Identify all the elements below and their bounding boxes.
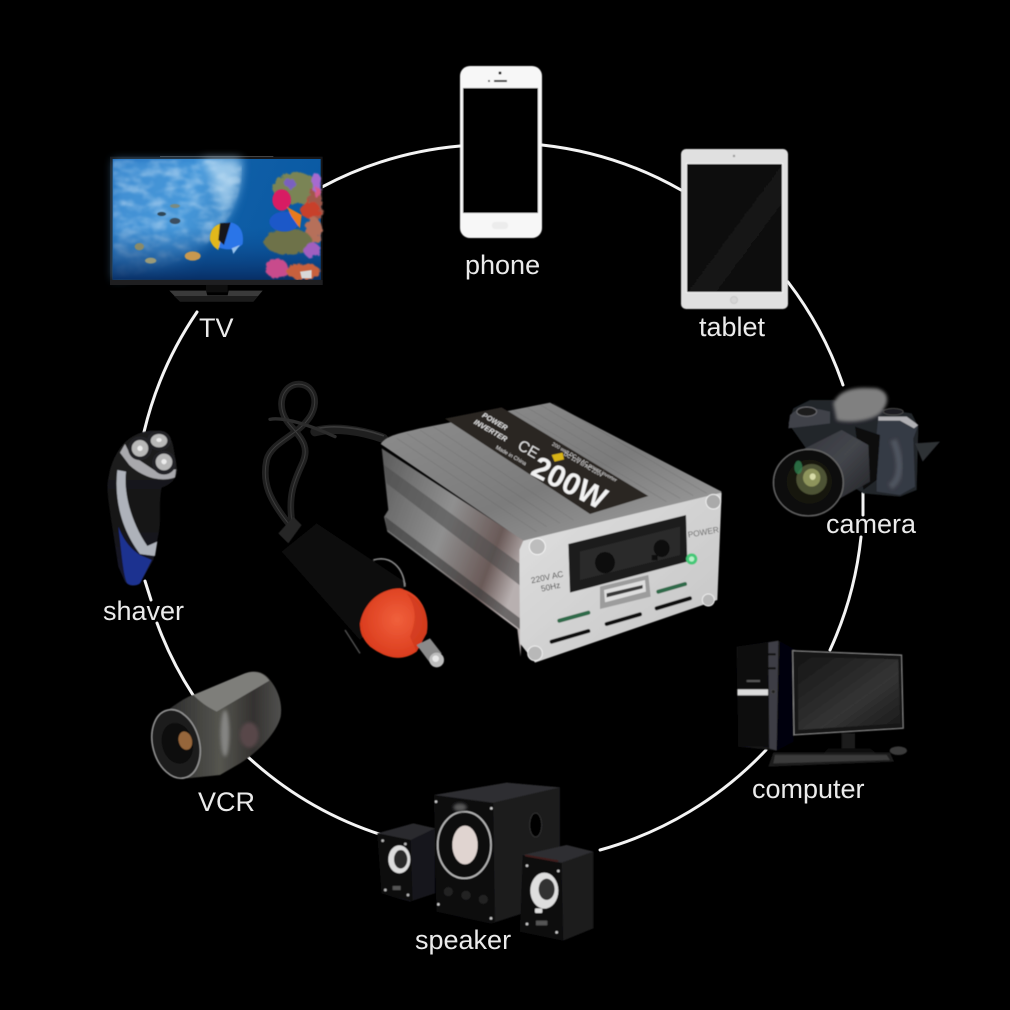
plug metal pin	[417, 638, 442, 665]
left satellite speaker	[377, 823, 435, 902]
phone body	[460, 66, 542, 238]
label text	[472, 411, 618, 516]
device: TV	[110, 156, 323, 343]
device: speaker	[377, 783, 593, 955]
panel markings: POWER	[687, 524, 720, 540]
label text: POWER	[481, 411, 510, 433]
plug red tip	[360, 588, 427, 658]
panel markings: 50Hz	[540, 580, 561, 594]
device: camera	[773, 388, 940, 539]
camera body	[773, 388, 940, 516]
device: phone	[460, 66, 542, 280]
label band	[445, 407, 648, 514]
monitor	[793, 651, 903, 735]
power inverter	[265, 384, 722, 667]
inverter case	[381, 403, 722, 663]
camera lens	[855, 427, 880, 490]
usb port	[600, 575, 651, 609]
tv screen	[113, 159, 321, 280]
panel markings: 220V AC	[530, 569, 564, 585]
power cable	[265, 384, 383, 523]
fish	[135, 189, 312, 278]
phone label: phone	[465, 250, 540, 280]
label text: 200 watt DC to AC power inverter	[551, 442, 618, 484]
tv set	[110, 156, 323, 302]
camcorder body	[144, 671, 281, 784]
shaver body	[107, 431, 177, 586]
tv bezel and stand	[110, 280, 323, 285]
panel markings	[530, 524, 720, 594]
top panel	[381, 403, 722, 541]
speaker set	[377, 783, 593, 941]
device: shaver	[103, 431, 184, 626]
desktop computer	[737, 641, 907, 767]
label text: Made in China	[494, 445, 527, 467]
tablet label: tablet	[699, 312, 766, 342]
power led	[686, 553, 697, 565]
cigarette lighter plug	[278, 517, 444, 667]
device: VCR camcorder	[144, 671, 281, 817]
right satellite speaker	[520, 845, 593, 941]
keyboard and mouse	[768, 753, 894, 767]
connecting circle	[144, 145, 863, 850]
side panel	[382, 448, 523, 657]
label text: 200W	[526, 450, 612, 516]
speaker label: speaker	[415, 925, 511, 955]
coral reef	[264, 173, 322, 280]
vcr label: VCR	[198, 787, 255, 817]
label text: INVERTER	[472, 417, 509, 444]
tablet body	[681, 149, 788, 309]
camera label: camera	[826, 509, 917, 539]
tv label: TV	[199, 313, 234, 343]
front panel	[519, 493, 722, 663]
device: computer	[737, 641, 907, 804]
tower	[737, 641, 797, 751]
subwoofer	[434, 783, 560, 923]
label text: DC 12V to AC 220V	[562, 452, 604, 479]
ac socket	[568, 515, 687, 593]
vent slots	[552, 584, 690, 642]
shaver label: shaver	[103, 596, 184, 626]
computer label: computer	[752, 774, 865, 804]
device: tablet	[681, 149, 788, 342]
label text: CE	[515, 437, 542, 462]
